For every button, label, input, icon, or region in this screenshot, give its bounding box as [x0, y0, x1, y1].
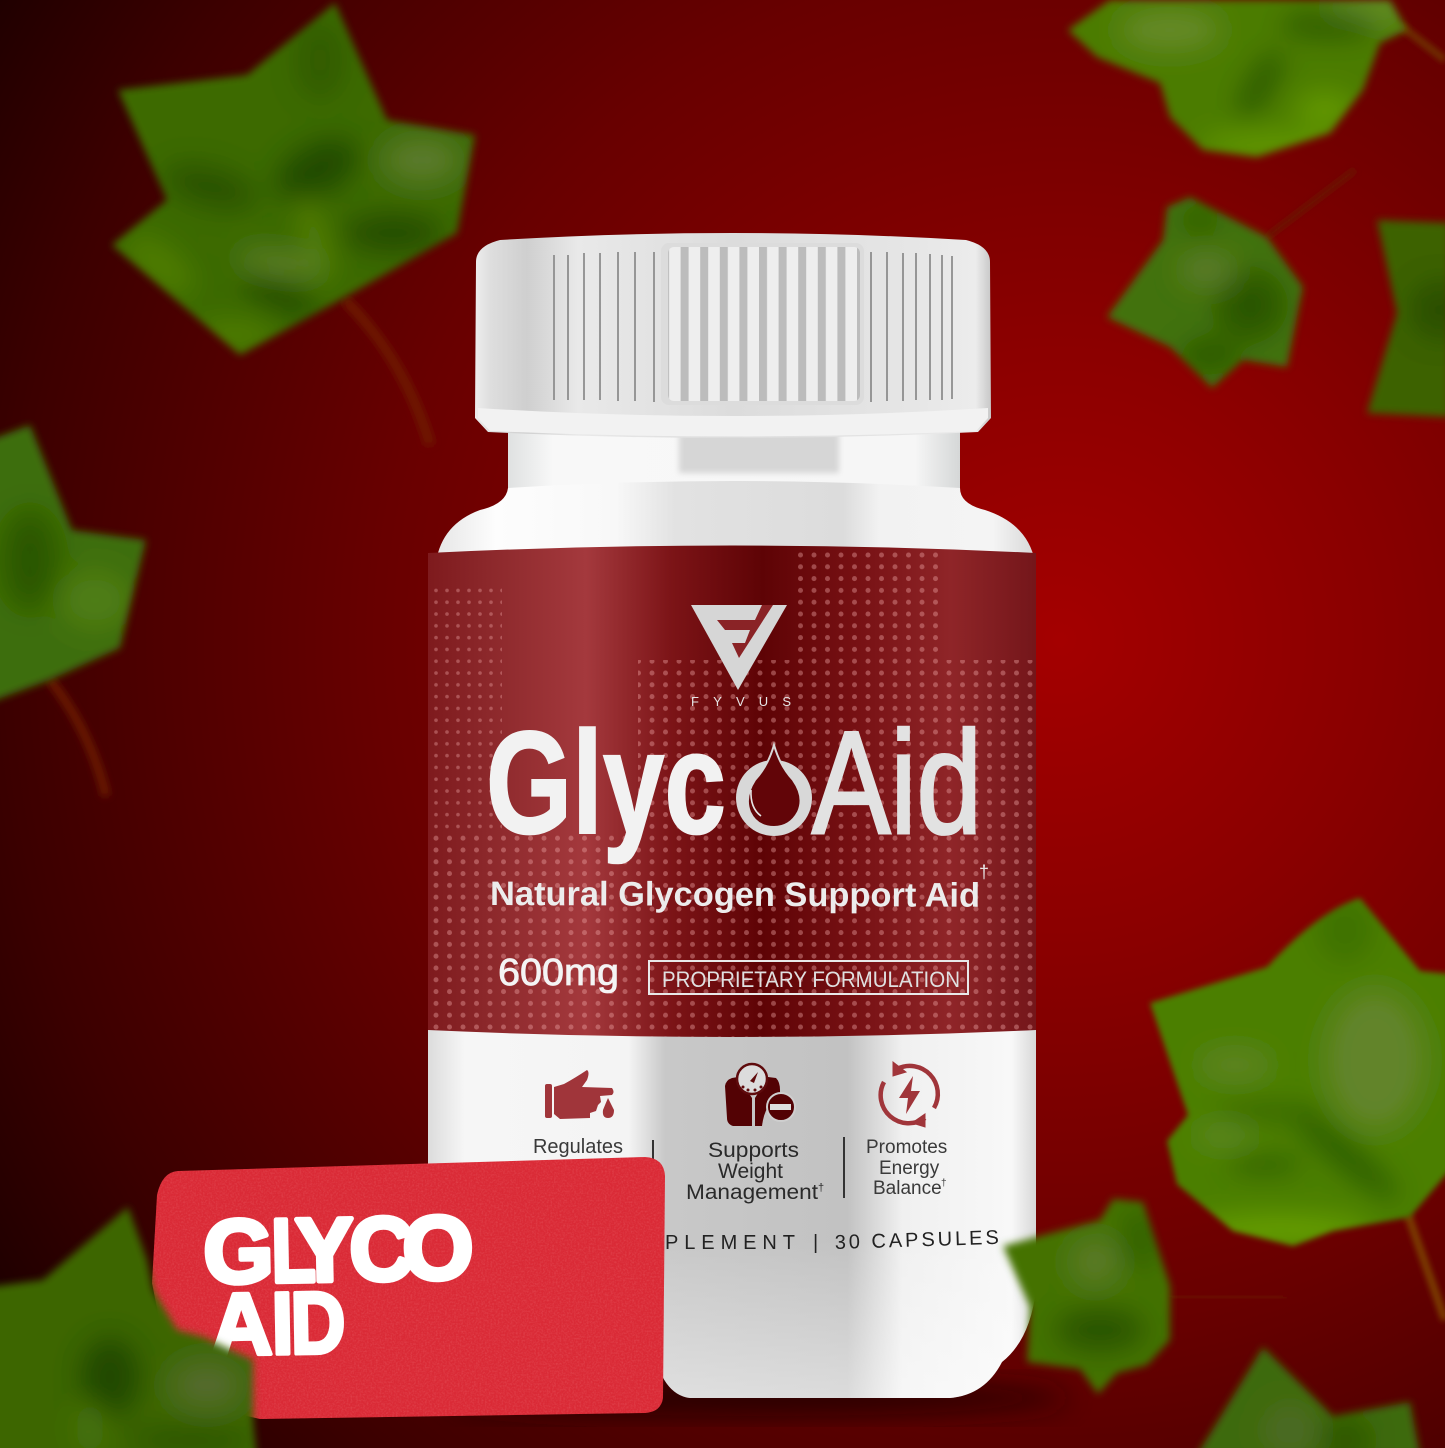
card title: GLYCO: C	[349, 1199, 414, 1300]
leaf: bottom left foreground	[0, 1207, 257, 1448]
icon: energy cycle	[881, 1062, 938, 1127]
card title: GLYCO: O	[402, 1198, 474, 1300]
bottle shadow	[450, 1380, 1070, 1416]
card title: AID	[210, 1273, 346, 1374]
bottle lower body	[428, 1030, 1036, 1398]
icon: droplet letter o	[736, 745, 812, 836]
card title: AID: D	[290, 1273, 346, 1373]
bottle neck	[508, 425, 960, 510]
benefit dividers	[653, 1137, 844, 1198]
card title: GLYCO: Y	[295, 1200, 354, 1301]
bottle shoulder	[436, 481, 1035, 562]
label dot pattern	[428, 548, 1036, 1045]
product name: Glyc: Glyc	[486, 701, 726, 864]
bottle cap	[475, 233, 991, 438]
card title: GLYCO: G	[203, 1202, 274, 1303]
supplement and capsule count line: |	[813, 1232, 818, 1254]
benefit: energy balance: Balance	[873, 1178, 942, 1199]
proprietary formulation badge: PROPRIETARY FORMULATION	[662, 967, 960, 992]
card title: GLYCO: L	[271, 1201, 316, 1302]
card texture	[150, 1155, 670, 1425]
benefit: weight management: Management	[686, 1181, 818, 1204]
leaf: middle left	[0, 425, 146, 796]
benefit: energy balance: Energy	[879, 1158, 940, 1179]
leaf: upper right	[1107, 170, 1355, 388]
leaf: top right	[1068, 0, 1445, 159]
benefit: weight management: Supports	[708, 1139, 799, 1162]
leaf: top left	[112, 3, 475, 445]
dosage: 600mg	[498, 952, 619, 994]
card body	[152, 1157, 665, 1419]
benefit: energy balance: Promotes	[866, 1137, 947, 1158]
product bottle	[428, 233, 1070, 1416]
icon: hand with blood drop	[545, 1070, 614, 1119]
lower body highlight	[640, 1240, 1036, 1398]
tagline: Natural Glycogen Support Aid	[490, 875, 980, 915]
red product name card	[150, 1155, 670, 1425]
leaf: bottom right	[1197, 1347, 1420, 1448]
icon: weight scale with minus	[725, 1064, 795, 1126]
card title: GLYCO	[203, 1198, 474, 1303]
benefit: weight management: †	[818, 1182, 824, 1194]
supplement and capsule count line: 30 CAPSULES	[834, 1227, 999, 1254]
brand logo mark	[691, 605, 787, 690]
red product label	[428, 540, 1036, 1050]
benefit: regulates: Regulates	[533, 1136, 623, 1158]
brand name: FYVUS	[691, 694, 791, 709]
supplement and capsule count line	[665, 1227, 999, 1254]
leaf: large lower right	[1150, 896, 1445, 1320]
card title: AID: I	[271, 1274, 294, 1373]
leaf: lower centre right	[1003, 1199, 1285, 1394]
benefit: energy balance: †	[941, 1178, 947, 1189]
leaf: far right edge	[1367, 220, 1445, 417]
card title: AID: A	[210, 1274, 273, 1374]
supplement and capsule count line: PLEMENT	[665, 1232, 795, 1254]
product name: Aid: Aid	[812, 701, 982, 864]
benefit: weight management: Weight	[718, 1160, 783, 1183]
dagger mark: †	[979, 862, 989, 882]
